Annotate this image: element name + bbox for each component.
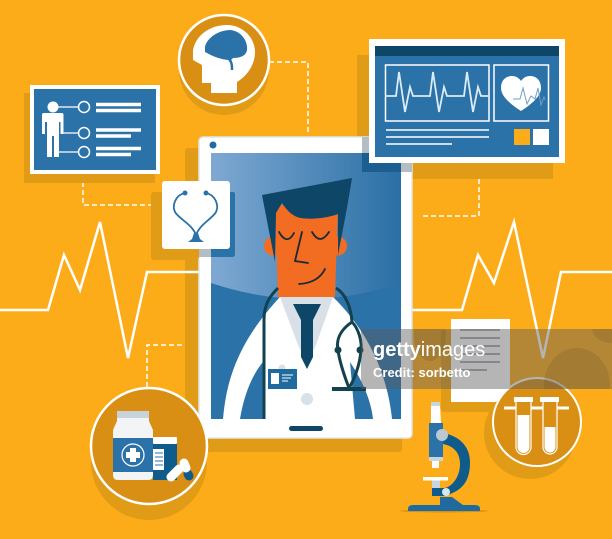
patient panel shadow: [24, 93, 155, 183]
document: [451, 319, 510, 402]
monitor shadow: [357, 55, 553, 179]
doctor: tie: [293, 304, 321, 369]
heart chart: [494, 65, 548, 121]
connector: brain to tablet: [269, 62, 308, 135]
tablet home button: [289, 426, 323, 431]
watermark logo text: gettyimages: [373, 339, 485, 361]
doctor: coat inner shading: [240, 362, 373, 419]
doctor: hair: [262, 178, 352, 262]
doctor: collar: [280, 297, 333, 351]
stethoscope card shadow: [151, 192, 235, 260]
tube one: [514, 397, 533, 455]
connectors: [57, 107, 78, 152]
stethoscope card: [162, 181, 230, 249]
connector: patient panel to stethoscope: [83, 174, 160, 205]
pills: [171, 469, 179, 477]
brain icon shadow: [179, 25, 269, 115]
jar: [153, 438, 177, 480]
ECG chart: [386, 65, 489, 121]
microscope: [400, 402, 488, 512]
doctor: coat button: [301, 393, 313, 405]
heartbeat line: right: [412, 222, 612, 358]
doctor: eyes, nose and smile: [279, 232, 329, 284]
patient panel: [30, 85, 160, 174]
doctor: coat: [223, 297, 392, 419]
tablet: [199, 137, 412, 438]
brain icon: [179, 15, 269, 105]
watermark texture: [414, 329, 612, 389]
bottle: [113, 411, 153, 480]
doctor: face: [275, 205, 338, 297]
medicine circle: [91, 388, 207, 504]
heartbeat line: left: [0, 222, 199, 358]
watermark: [361, 329, 612, 389]
person icon: [42, 102, 64, 157]
text lines: [386, 130, 489, 144]
doctor: stethoscope: [264, 288, 366, 419]
connector: medicine to tablet: [147, 345, 199, 387]
watermark credit text: Credit: sorbetto: [373, 365, 471, 380]
doctor: badge: [268, 364, 297, 389]
document shadow: [441, 330, 501, 412]
connector: monitor to tablet: [420, 163, 479, 216]
monitor panel: [369, 39, 565, 163]
test tubes shadow: [484, 387, 576, 479]
tube two: [540, 397, 559, 454]
tablet camera: [210, 142, 216, 148]
colour swatches: [514, 129, 530, 145]
monitor shadow falling on tablet: [362, 137, 412, 172]
test tubes circle: [493, 378, 581, 466]
tablet shadow: [185, 148, 402, 452]
text lines: [96, 104, 141, 154]
doctor: ears: [264, 236, 277, 256]
medicine circle shadow: [91, 404, 207, 520]
tablet screen with doctor: [211, 153, 401, 419]
